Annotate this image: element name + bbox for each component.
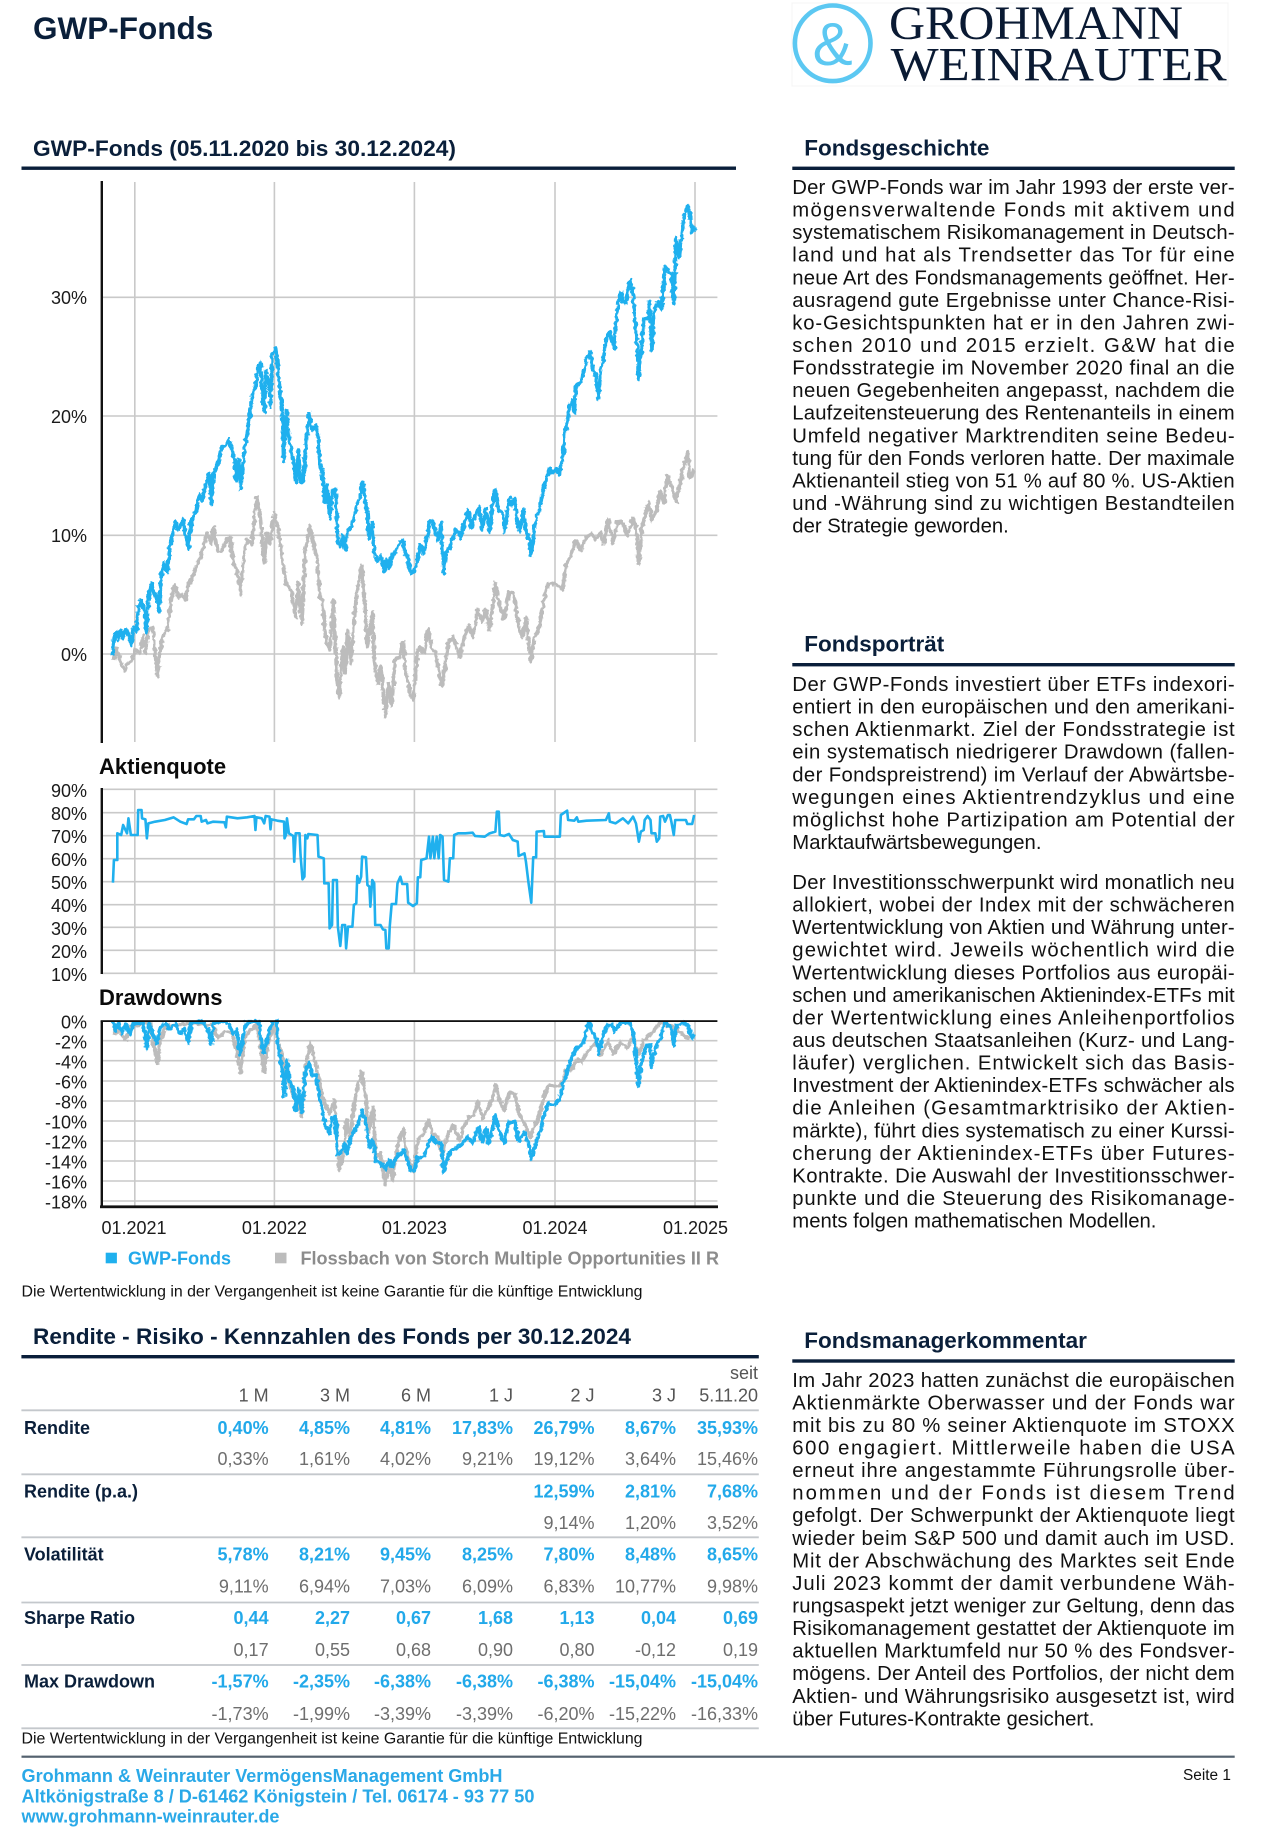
text block: Fondsgeschichte <box>792 177 1235 538</box>
axis labels: Aktienquote: 50% <box>51 873 87 893</box>
row: Rendite: 4,81% <box>380 1418 431 1438</box>
axis labels: Aktienquote: 10% <box>51 965 87 985</box>
text block: Fondsporträt paragraph 2: punkte und die Steuerung des Risikomanage- <box>792 1188 1235 1210</box>
row: Rendite: 19,12% <box>533 1449 594 1469</box>
table header: 3 M <box>320 1386 350 1406</box>
table header: seit <box>730 1363 758 1383</box>
row: Volatilität: 7,80% <box>543 1545 594 1565</box>
row: Sharpe Ratio: 0,67 <box>396 1608 431 1628</box>
table header: 5.11.20 <box>699 1386 758 1406</box>
axis labels: Aktienquote: 20% <box>51 942 87 962</box>
table: key figures <box>21 1363 759 1728</box>
text block: Fondsgeschichte: tung für den Fonds verloren hatte. Der maximale <box>792 448 1235 470</box>
text block: Fondsporträt paragraph 2: cherung der Aktienindex-ETFs über Futures- <box>792 1143 1235 1165</box>
row: Rendite p.a. <box>24 1482 758 1533</box>
row: Rendite p.a.: 7,68% <box>707 1482 758 1502</box>
text block: Fondsmanagerkommentar: mit bis zu 80 % seiner Aktienquote im STOXX <box>792 1415 1235 1437</box>
row: Rendite: 0,40% <box>218 1418 269 1438</box>
axis labels: performance: 10% <box>51 526 87 546</box>
text block: Fondsporträt paragraph 2: Investment der Aktienindex-ETFs schwächer als <box>792 1075 1235 1097</box>
row: Sharpe Ratio: 0,55 <box>315 1640 350 1660</box>
text block: Fondsmanagerkommentar: wieder beim S&P 500 und damit auch im USD. <box>791 1528 1235 1550</box>
page number: Seite 1 <box>1183 1767 1231 1784</box>
axis labels: Drawdowns: -6% <box>55 1072 87 1092</box>
row: Max Drawdown: -6,38% <box>537 1672 594 1692</box>
logo: Grohmann & Weinrauter <box>792 0 1228 92</box>
row: Rendite p.a.: 2,81% <box>625 1482 676 1502</box>
text block: Fondsmanagerkommentar <box>791 1370 1235 1730</box>
legend: GWP-Fonds <box>128 1248 231 1268</box>
axis labels: Aktienquote: 90% <box>51 781 87 801</box>
text block: Fondsporträt paragraph 2 <box>792 872 1235 1233</box>
row: Volatilität: 8,25% <box>462 1545 513 1565</box>
row: Volatilität: 9,11% <box>219 1577 269 1597</box>
row: Volatilität <box>24 1545 758 1597</box>
row: Max Drawdown: -3,39% <box>374 1704 431 1724</box>
row: Volatilität: Volatilität <box>24 1545 104 1565</box>
row: Sharpe Ratio: 0,68 <box>396 1640 431 1660</box>
row: Rendite: 9,21% <box>462 1449 513 1469</box>
line chart: Drawdowns <box>45 1012 728 1238</box>
row: Volatilität: 7,03% <box>380 1577 431 1597</box>
row: Sharpe Ratio: Sharpe Ratio <box>24 1608 135 1628</box>
footer: address <box>20 1766 535 1827</box>
row: Rendite: 35,93% <box>697 1418 758 1438</box>
row: Sharpe Ratio: 0,19 <box>723 1640 758 1660</box>
row: Max Drawdown <box>24 1672 758 1724</box>
row: Volatilität: 8,48% <box>625 1545 676 1565</box>
title: GWP-Fonds <box>33 10 213 46</box>
axis labels: Aktienquote: 80% <box>51 804 87 824</box>
axis labels: performance: 0% <box>61 645 87 665</box>
axis labels: Drawdowns: -14% <box>45 1152 87 1172</box>
table header: 1 J <box>489 1386 513 1406</box>
row: Volatilität: 8,21% <box>299 1545 350 1565</box>
text block: Fondsgeschichte: Laufzeitensteuerung des Rentenanteils in einem <box>792 403 1235 425</box>
row: Rendite p.a.: Rendite (p.a.) <box>24 1482 138 1502</box>
text block: Fondsmanagerkommentar: über Futures-Kontrakte gesichert. <box>792 1708 1094 1730</box>
row: Rendite: 4,02% <box>380 1449 431 1469</box>
heading: chart section: GWP-Fonds (05.11.2020 bis 30.12.2024) <box>33 136 456 161</box>
heading: Fondsgeschichte <box>792 135 1235 170</box>
text block: Fondsgeschichte: ausragend gute Ergebnisse unter Chance-Risi- <box>792 290 1235 312</box>
row: Volatilität: 10,77% <box>615 1577 676 1597</box>
heading: Fondsgeschichte: Fondsgeschichte <box>804 135 989 160</box>
row: Max Drawdown: -6,38% <box>456 1672 513 1692</box>
disclaimer: chart: Die Wertentwicklung in der Vergangenheit ist keine Garantie für die künftige Entwicklung <box>22 1284 642 1301</box>
row: Sharpe Ratio: 0,90 <box>478 1640 513 1660</box>
row: Rendite p.a.: 3,52% <box>707 1513 758 1533</box>
text block: Fondsmanagerkommentar: Im Jahr 2023 hatten zunächst die europäischen <box>792 1370 1235 1392</box>
axis labels: Drawdowns: 0% <box>61 1012 87 1032</box>
data line: GWP-Fonds drawdown <box>112 1022 695 1172</box>
axis labels: Aktienquote: 30% <box>51 919 87 939</box>
data line: Flossbach von Storch <box>114 452 695 717</box>
text block: Fondsporträt paragraph 1: wegungen eines Aktientrendzyklus und eine <box>791 787 1235 809</box>
table header <box>239 1363 758 1406</box>
row: Sharpe Ratio: 0,80 <box>559 1640 594 1660</box>
row: Rendite: 0,33% <box>218 1449 269 1469</box>
footer rule <box>22 1756 1235 1758</box>
text block: Fondsmanagerkommentar: Juli 2023 kommt der damit verbundene Wäh- <box>792 1573 1235 1595</box>
text block: Fondsmanagerkommentar: Risikomanagement gestattet der Aktienquote im <box>792 1618 1235 1640</box>
text block: Fondsporträt paragraph 2: der Wertentwicklung eines Anleihenportfolios <box>792 1007 1235 1029</box>
footer: address: www.grohmann-weinrauter.de <box>20 1807 280 1827</box>
row: Rendite p.a.: 12,59% <box>533 1482 594 1502</box>
axis labels: performance: 30% <box>51 288 87 308</box>
axis labels: Drawdowns: -4% <box>55 1052 87 1072</box>
row: Rendite <box>24 1418 758 1469</box>
text block: Fondsporträt paragraph 2: schen und amerikanischen Aktienindex-ETFs mit <box>792 985 1235 1007</box>
table header: 2 J <box>570 1386 594 1406</box>
line chart: fund performance <box>51 181 717 743</box>
text block: Fondsgeschichte: land und hat als Trendsetter das Tor für eine <box>792 245 1235 267</box>
row: Sharpe Ratio: 0,04 <box>641 1608 676 1628</box>
heading: table section: Rendite - Risiko - Kennzahlen des Fonds per 30.12.2024 <box>33 1324 632 1349</box>
x-axis labels: 01.2021 <box>101 1218 167 1238</box>
row: Rendite: 17,83% <box>452 1418 513 1438</box>
heading: Fondsmanagerkommentar: Fondsmanagerkommentar <box>804 1328 1087 1353</box>
row: Max Drawdown: -15,04% <box>691 1672 758 1692</box>
disclaimer: table: Die Wertentwicklung in der Vergangenheit ist keine Garantie für die künftige Entwicklung <box>22 1730 642 1747</box>
text block: Fondsporträt paragraph 2: Der Investitionsschwerpunkt wird monatlich neu <box>792 872 1235 894</box>
row: Rendite: Rendite <box>24 1418 90 1438</box>
row: Sharpe Ratio: -0,12 <box>635 1640 676 1660</box>
text block: Fondsmanagerkommentar: mögens. Der Anteil des Portfolios, der nicht dem <box>792 1663 1235 1685</box>
row: Rendite: 4,85% <box>299 1418 350 1438</box>
text block: Fondsporträt paragraph 2: Wertentwicklung von Aktien und Währung unter- <box>792 917 1235 939</box>
axis labels: Drawdowns: -2% <box>55 1032 87 1052</box>
row: Sharpe Ratio: 2,27 <box>315 1608 350 1628</box>
text block: Fondsmanagerkommentar: rungsaspekt jetzt weniger zur Geltung, denn das <box>792 1596 1235 1618</box>
text block: Fondsmanagerkommentar: Mit der Abschwächung des Marktes seit Ende <box>792 1550 1235 1572</box>
row: Max Drawdown: -1,57% <box>212 1672 269 1692</box>
row: Rendite: 8,67% <box>625 1418 676 1438</box>
row: Volatilität: 5,78% <box>218 1545 269 1565</box>
text block: Fondsporträt paragraph 1 <box>791 674 1235 854</box>
axis labels: Drawdowns: -16% <box>45 1172 87 1192</box>
row: Max Drawdown: -6,38% <box>374 1672 431 1692</box>
row: Volatilität: 9,45% <box>380 1545 431 1565</box>
line chart: Aktienquote <box>51 781 717 985</box>
text block: Fondsporträt paragraph 1: der Fondspreistrend) im Verlauf der Abwärtsbe- <box>792 764 1235 786</box>
row: Rendite p.a.: 9,14% <box>543 1513 594 1533</box>
data line: GWP-Fonds <box>112 207 695 655</box>
row: Max Drawdown: -1,73% <box>212 1704 269 1724</box>
row: Volatilität: 6,83% <box>543 1577 594 1597</box>
text block: Fondsporträt paragraph 2: die Anleihen (Gesamtmarktrisiko der Aktien- <box>792 1098 1235 1120</box>
row: Sharpe Ratio: 1,68 <box>478 1608 513 1628</box>
row: Max Drawdown: -1,99% <box>293 1704 350 1724</box>
text block: Fondsporträt paragraph 2: läufer) verglichen. Entwickelt sich das Basis- <box>792 1053 1235 1075</box>
row: Volatilität: 8,65% <box>707 1545 758 1565</box>
table header: 1 M <box>239 1386 269 1406</box>
heading: chart section <box>22 136 736 170</box>
axis labels: performance: 20% <box>51 407 87 427</box>
text block: Fondsgeschichte: Fondsstrategie im November 2020 final an die <box>792 358 1235 380</box>
axis labels: Drawdowns: -18% <box>45 1192 87 1212</box>
text block: Fondsporträt paragraph 2: allokiert, wobei der Index mit der schwächeren <box>792 895 1235 917</box>
axis labels: Aktienquote: 40% <box>51 896 87 916</box>
row: Volatilität: 6,09% <box>462 1577 513 1597</box>
row: Rendite: 1,61% <box>299 1449 350 1469</box>
table header: 3 J <box>652 1386 676 1406</box>
row: Sharpe Ratio: 0,17 <box>234 1640 269 1660</box>
text block: Fondsporträt paragraph 1: entiert in den europäischen und den amerikani- <box>792 697 1235 719</box>
legend: Flossbach von Storch Multiple Opportunities II R <box>300 1248 719 1268</box>
row: Max Drawdown: -15,04% <box>609 1672 676 1692</box>
text block: Fondsgeschichte: neue Art des Fondsmanagements geöffnet. Her- <box>792 267 1235 289</box>
text block: Fondsgeschichte: ko-Gesichtspunkten hat er in den Jahren zwi- <box>792 312 1235 334</box>
data line: Aktienquote <box>113 810 694 948</box>
text block: Fondsgeschichte: Der GWP-Fonds war im Jahr 1993 der erste ver- <box>792 177 1235 199</box>
x-axis labels: 01.2024 <box>522 1218 588 1238</box>
heading: Fondsmanagerkommentar <box>792 1328 1235 1363</box>
text block: Fondsgeschichte: mögensverwaltende Fonds mit aktivem und <box>792 200 1235 222</box>
axis labels: Aktienquote <box>51 781 87 985</box>
axis labels: Drawdowns: -10% <box>45 1112 87 1132</box>
axis labels: Aktienquote: 70% <box>51 827 87 847</box>
text block: Fondsmanagerkommentar: 600 engagiert. Mittlerweile haben die USA <box>792 1438 1235 1460</box>
footer: address: Altkönigstraße 8 / D-61462 Königstein / Tel. 06174 - 93 77 50 <box>22 1786 534 1806</box>
text block: Fondsporträt paragraph 1: möglichst hohe Partizipation am Potential der <box>792 809 1235 831</box>
row: Sharpe Ratio: 0,44 <box>234 1608 269 1628</box>
text block: Fondsgeschichte: Aktienanteil stieg von 51 % auf 80 %. US-Aktien <box>792 470 1235 492</box>
text block: Fondsgeschichte: der Strategie geworden. <box>792 516 1009 538</box>
text block: Fondsgeschichte: schen 2010 und 2015 erzielt. G&W hat die <box>792 335 1235 357</box>
row: Rendite: 3,64% <box>625 1449 676 1469</box>
text block: Fondsgeschichte: und -Währung sind zu wichtigen Bestandteilen <box>792 493 1235 515</box>
text block: Fondsgeschichte: Umfeld negativer Marktrenditen seine Bedeu- <box>792 425 1235 447</box>
data line: Flossbach drawdown <box>114 1022 692 1185</box>
heading: Aktienquote: Aktienquote <box>99 754 226 779</box>
axis labels: Drawdowns: -12% <box>45 1132 87 1152</box>
row: Sharpe Ratio: 0,69 <box>723 1608 758 1628</box>
text block: Fondsporträt paragraph 2: Kontrakte. Die Auswahl der Investitionsschwer- <box>792 1165 1235 1187</box>
text block: Fondsporträt paragraph 2: ments folgen mathematischen Modellen. <box>792 1211 1156 1233</box>
text block: Fondsmanagerkommentar: Aktien- und Währungsrisiko ausgesetzt ist, wird <box>792 1686 1235 1708</box>
row: Max Drawdown: Max Drawdown <box>24 1672 155 1692</box>
text block: Fondsporträt paragraph 2: Wertentwicklung dieses Portfolios aus europäi- <box>792 962 1235 984</box>
text block: Fondsporträt paragraph 1: ein systematisch niedrigerer Drawdown (fallen- <box>792 742 1235 764</box>
row: Sharpe Ratio <box>24 1608 758 1660</box>
text block: Fondsporträt paragraph 1: schen Aktienmarkt. Ziel der Fondsstrategie ist <box>792 719 1235 741</box>
text block: Fondsmanagerkommentar: aktuellen Marktumfeld nur 50 % des Fondsver- <box>792 1641 1235 1663</box>
table header: 6 M <box>401 1386 431 1406</box>
x-axis labels: 01.2022 <box>242 1218 307 1238</box>
footer: address: Grohmann & Weinrauter VermögensManagement GmbH <box>22 1766 502 1786</box>
text block: Fondsmanagerkommentar: nommen und der Fonds ist diesem Trend <box>792 1483 1235 1505</box>
heading: Fondsporträt: Fondsporträt <box>804 632 945 657</box>
row: Rendite: 26,79% <box>533 1418 594 1438</box>
text block: Fondsporträt paragraph 2: gewichtet wird. Jeweils wöchentlich wird die <box>792 940 1235 962</box>
heading: Drawdowns: Drawdowns <box>99 985 222 1010</box>
text block: Fondsmanagerkommentar: Aktienmärkte Oberwasser und der Fonds war <box>792 1392 1235 1414</box>
row: Max Drawdown: -2,35% <box>293 1672 350 1692</box>
heading: Fondsporträt <box>792 632 1235 666</box>
x-axis labels: 01.2025 <box>663 1218 728 1238</box>
row: Rendite p.a.: 1,20% <box>625 1513 676 1533</box>
x-axis labels <box>101 1218 728 1238</box>
text block: Fondsgeschichte: neuen Gegebenheiten angepasst, nachdem die <box>792 380 1235 402</box>
row: Max Drawdown: -3,39% <box>456 1704 513 1724</box>
axis labels: Drawdowns <box>45 1012 87 1212</box>
axis labels: performance <box>51 288 87 665</box>
logo: Grohmann & Weinrauter: WEINRAUTER <box>891 40 1227 92</box>
text block: Fondsporträt paragraph 1: Der GWP-Fonds investiert über ETFs indexori- <box>792 674 1235 696</box>
text block: Fondsgeschichte: systematischem Risikomanagement in Deutsch- <box>792 222 1235 244</box>
row: Volatilität: 9,98% <box>707 1577 758 1597</box>
x-axis labels: 01.2023 <box>382 1218 447 1238</box>
row: Volatilität: 6,94% <box>299 1577 350 1597</box>
logo: Grohmann & Weinrauter: & <box>813 11 853 78</box>
axis labels: Aktienquote: 60% <box>51 850 87 870</box>
heading: table section <box>21 1324 759 1358</box>
row: Sharpe Ratio: 1,13 <box>559 1608 594 1628</box>
axis labels: Drawdowns: -8% <box>55 1092 87 1112</box>
text block: Fondsporträt paragraph 2: aus deutschen Staatsanleihen (Kurz- und Lang- <box>792 1030 1235 1052</box>
text block: Fondsporträt paragraph 2: märkte), führt dies systematisch zu einer Kurssi- <box>792 1120 1235 1142</box>
text block: Fondsmanagerkommentar: gefolgt. Der Schwerpunkt der Aktienquote liegt <box>792 1505 1235 1527</box>
legend <box>106 1248 719 1268</box>
row: Max Drawdown: -16,33% <box>691 1704 758 1724</box>
row: Max Drawdown: -6,20% <box>537 1704 594 1724</box>
text block: Fondsmanagerkommentar: erneut ihre angestammte Führungsrolle über- <box>792 1460 1235 1482</box>
row: Rendite: 15,46% <box>697 1449 758 1469</box>
row: Max Drawdown: -15,22% <box>609 1704 676 1724</box>
text block: Fondsporträt paragraph 1: Marktaufwärtsbewegungen. <box>792 832 1041 854</box>
